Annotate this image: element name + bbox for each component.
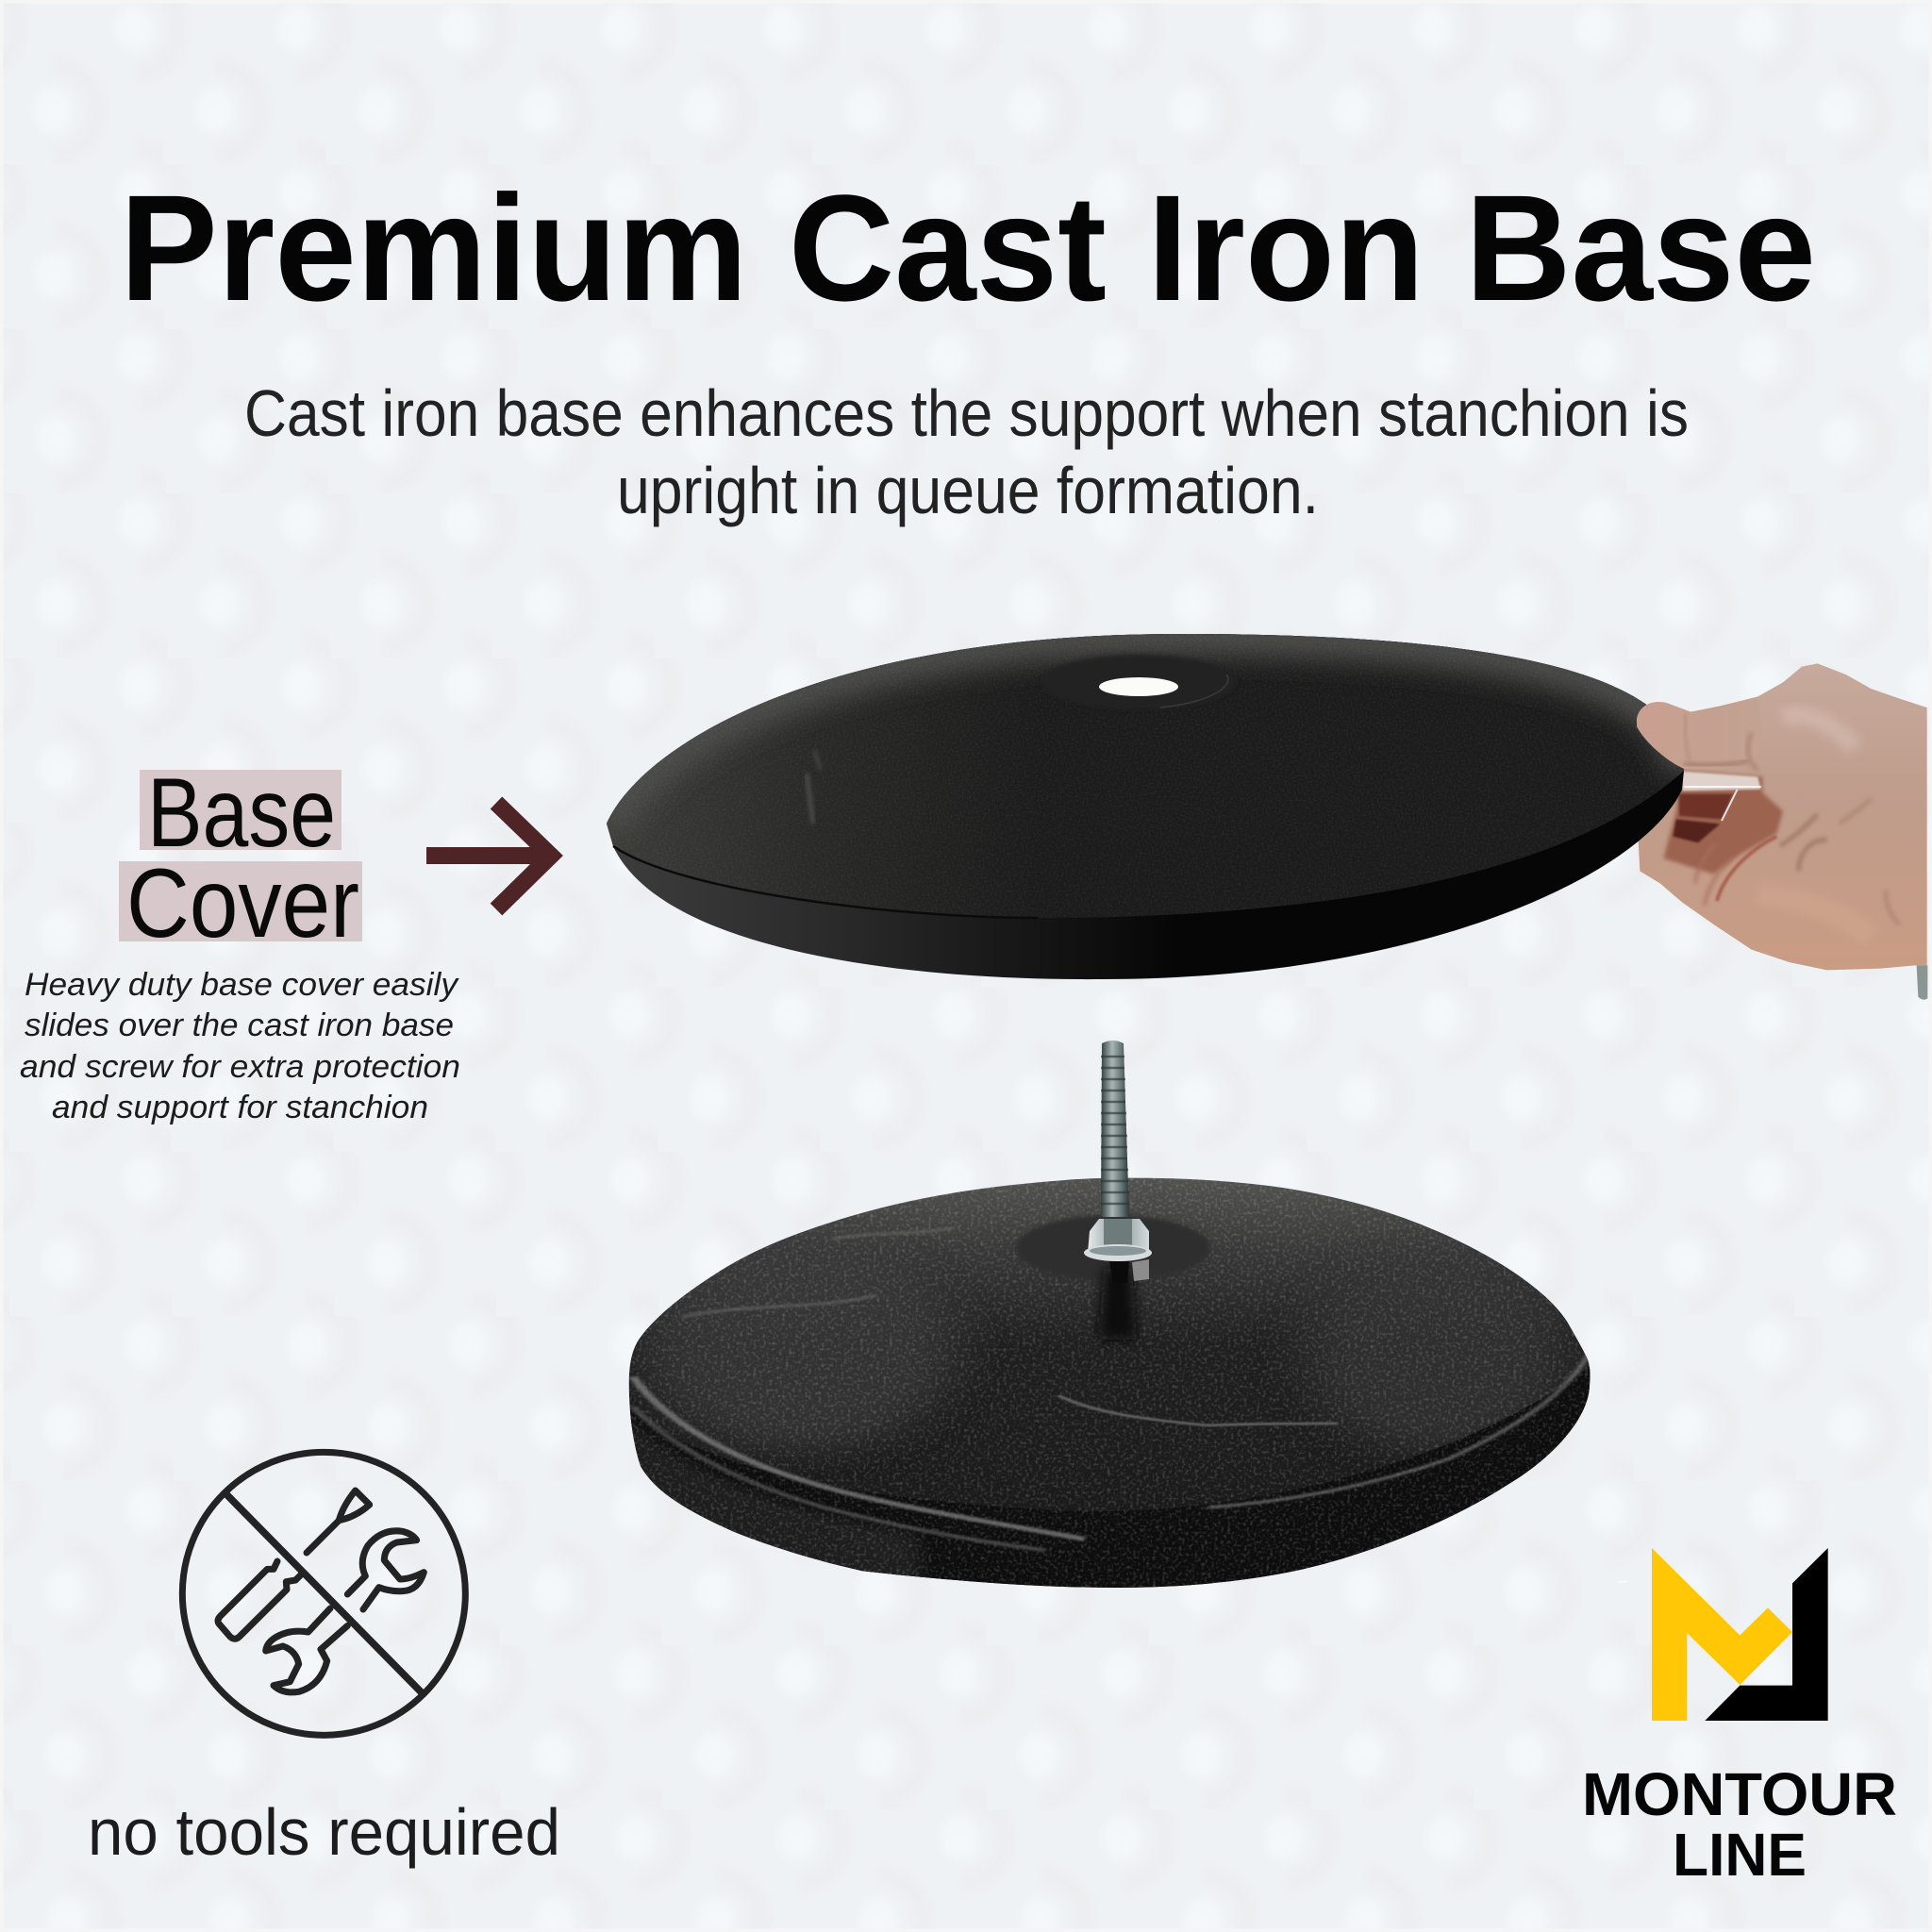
base cover description: slides over the cast iron base	[25, 1008, 454, 1043]
dish around bolt	[1016, 1215, 1210, 1281]
bolt thread	[1101, 1041, 1129, 1217]
base cover description	[20, 967, 460, 1125]
label: base cover: Cover	[126, 849, 359, 958]
cover rim	[607, 634, 1684, 979]
subtitle text	[244, 376, 1689, 527]
title: Premium Cast Iron Base	[120, 163, 1816, 332]
caption: no tools required: no tools required	[88, 1795, 560, 1869]
cover centre hole	[1041, 655, 1236, 709]
logo: Montour Line	[1582, 1548, 1897, 1889]
photo: hand palm	[1635, 663, 1927, 1000]
logo wordmark	[1582, 1760, 1897, 1889]
screwdriver	[218, 1491, 370, 1639]
arrow pointing to base cover	[426, 803, 553, 909]
photo: thumb over disc	[1637, 698, 1764, 771]
logo wordmark: LINE	[1673, 1821, 1807, 1889]
subtitle text: Cast iron base enhances the support when stanchion is	[244, 376, 1689, 450]
wrench	[266, 1531, 424, 1692]
base cover description: Heavy duty base cover easily	[25, 967, 459, 1003]
subtitle text: upright in queue formation.	[617, 454, 1319, 527]
logo wordmark: MONTOUR	[1582, 1760, 1897, 1828]
base cover description: and support for stanchion	[52, 1090, 428, 1125]
nut and flange	[1084, 1219, 1152, 1283]
photo: cast iron base with bolt	[604, 1041, 1618, 1601]
icon: no tools	[182, 1452, 465, 1735]
cast iron dome	[628, 1177, 1591, 1588]
label: base cover	[119, 758, 362, 958]
photo: base cover disc	[594, 623, 1698, 979]
logo mark	[1618, 1548, 1828, 1721]
rim highlights	[633, 1377, 1085, 1540]
base cover description: and screw for extra protection	[20, 1049, 460, 1085]
cover top surface	[594, 623, 1698, 924]
label: base cover: Base	[147, 758, 336, 868]
